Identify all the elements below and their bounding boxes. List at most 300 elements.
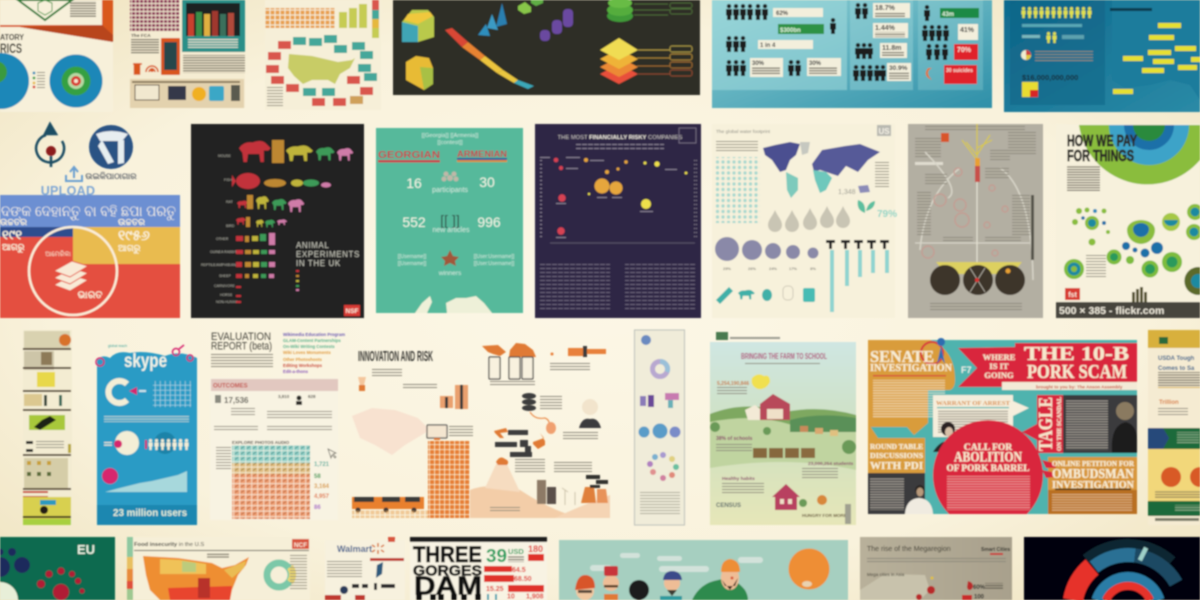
caption bar <box>1056 302 1200 318</box>
legend <box>875 162 889 188</box>
icon: cursor <box>328 449 336 458</box>
small line group <box>26 440 71 453</box>
donut <box>652 361 668 376</box>
red outer segment <box>1073 567 1092 600</box>
yellow roots <box>962 124 992 160</box>
panel: long strip infographic <box>23 330 72 525</box>
subtitle <box>745 362 820 365</box>
winners right <box>474 254 515 267</box>
subtitle lines <box>576 143 664 149</box>
pie bubble <box>104 431 139 455</box>
chart title <box>296 241 360 268</box>
panel: innovation and risk <box>352 343 610 518</box>
circle with books: ଭାରତ <box>78 290 102 301</box>
small label: global reach <box>108 344 127 348</box>
icon: syringe <box>550 346 606 357</box>
stat: 1.44%: 1.44% <box>875 25 896 32</box>
text lines <box>1155 490 1200 498</box>
stat lines <box>214 408 332 432</box>
figure: big money: $16,000,000,000 <box>1022 73 1078 82</box>
title: senate: SENATE <box>870 347 934 366</box>
bubble labels <box>540 157 677 238</box>
donut chart <box>267 563 293 587</box>
intro <box>211 353 273 368</box>
bus <box>352 497 424 512</box>
red callouts <box>266 41 373 106</box>
stat: 70%: 70% <box>957 47 972 54</box>
cluster: small bubbles <box>1072 208 1110 246</box>
panel: skype statistics <box>96 344 197 525</box>
stat: right: 23,000,254 students <box>808 461 854 467</box>
blue side <box>376 562 383 578</box>
stat: 62%: 62% <box>776 11 789 17</box>
field <box>710 418 856 470</box>
label: new articles <box>433 227 470 234</box>
bar chart <box>339 4 367 28</box>
isometric ribbon <box>445 28 534 89</box>
waffle values: 4,957 <box>314 494 330 500</box>
text block <box>490 381 535 386</box>
title: the 10-b: THE 10-B <box>1024 343 1129 365</box>
map <box>860 574 930 600</box>
colour strip <box>127 537 133 600</box>
icon: upload tray <box>66 167 82 181</box>
stat lines <box>1158 406 1188 416</box>
warrant callout <box>933 395 1029 437</box>
stat: 1,348 <box>838 189 856 196</box>
wall chart <box>428 441 470 518</box>
logo: Smart Cities <box>981 547 1010 553</box>
row labels: GUINEA RABBIT <box>210 250 238 254</box>
row labels: CARNIVORE <box>214 284 235 288</box>
ochre box round table: ROUND TABLE <box>870 442 923 451</box>
text blocks <box>490 459 592 512</box>
taps and streams <box>826 240 889 312</box>
program list: Edit-a-thons <box>283 369 309 374</box>
stat: people: 628 <box>308 394 316 399</box>
tan callout <box>350 96 363 104</box>
illustrations <box>799 495 827 507</box>
title: pork scam: PORK SCAM <box>1027 361 1127 383</box>
right year text: ଆଗରୁ <box>118 243 141 255</box>
central trunk <box>975 158 980 262</box>
person <box>579 399 601 428</box>
wind turbines <box>562 488 575 505</box>
stat: 79%: 79% <box>877 209 897 220</box>
map: usa choropleth <box>143 556 249 600</box>
ring chart <box>108 381 146 403</box>
row labels: HORSE <box>220 293 233 297</box>
panel: evaluation report <box>210 331 345 520</box>
logo: NSF <box>344 305 360 316</box>
row: mouse <box>239 140 353 163</box>
logo: US <box>877 125 891 136</box>
rule <box>134 550 309 551</box>
outcomes band <box>211 379 338 391</box>
right year text: ଉଚ୍ଚତର <box>118 217 145 227</box>
photo block: crowd <box>182 0 245 52</box>
stat lines <box>104 416 189 422</box>
connector boxes: layers <box>637 46 692 76</box>
program list: Wikimedia Education Program <box>283 332 345 337</box>
ochre box round table <box>868 423 925 478</box>
stat: people: 3,810 <box>278 394 290 399</box>
rule <box>1158 387 1200 388</box>
tray of thumbnails <box>130 79 244 108</box>
stat: 62% <box>773 8 823 17</box>
red rows <box>484 554 544 593</box>
row labels: MOUSE <box>218 154 232 158</box>
legend <box>267 86 283 106</box>
circle icons <box>1161 467 1200 487</box>
grid card <box>24 458 68 488</box>
yellow map tags <box>1113 23 1200 94</box>
red rows: 15.25 <box>486 586 504 593</box>
people rows <box>726 3 949 81</box>
bubble: finance <box>1162 213 1180 231</box>
panel: food insecurity map <box>127 537 310 600</box>
yellow header <box>1148 330 1200 348</box>
isometric pie 1 <box>402 10 434 42</box>
map label: Mega cities in Asia <box>867 572 905 577</box>
red circle <box>933 420 1043 514</box>
heading: USDA Tough <box>1158 356 1195 362</box>
petition box heading bg <box>1048 457 1137 490</box>
stat: 30.9%: 30.9% <box>889 65 908 72</box>
stat: 30%: 30% <box>752 61 765 67</box>
text block <box>183 55 245 73</box>
row labels: NON-HUMAN <box>216 300 238 304</box>
small rows: green <box>260 234 267 278</box>
red rows: 64.5 <box>512 567 526 574</box>
panel: innovation and risk: INNOVATION AND RISK <box>358 348 433 365</box>
bubble: right edge top <box>1187 204 1200 220</box>
panel: three gorges dam <box>410 537 547 600</box>
panel: how we pay for things <box>1056 124 1200 318</box>
trees <box>710 422 771 435</box>
heading: ATORY <box>0 32 24 42</box>
bubble: right edge lower <box>1186 224 1200 240</box>
bubble percentages: 17% <box>789 266 797 271</box>
yellow green card <box>23 497 71 525</box>
cable and mouse <box>530 412 556 434</box>
character: cap moustache <box>603 566 619 600</box>
stat block <box>717 381 749 396</box>
people row <box>1022 7 1092 18</box>
ochre speech bubble <box>868 340 955 435</box>
petition titles: INVESTIGATION <box>1052 479 1134 491</box>
header <box>422 133 479 146</box>
logo: F7 <box>961 365 972 375</box>
bubbles: middle <box>1106 242 1182 278</box>
text block <box>449 425 473 436</box>
plane right <box>533 433 545 449</box>
bubble: large green blue half <box>1127 220 1155 244</box>
icon: maps top <box>482 343 536 357</box>
table <box>540 263 695 309</box>
text block <box>550 362 590 370</box>
area chart <box>105 471 187 492</box>
panel: laboratory statistics poster <box>0 0 113 112</box>
stat: bottom <box>488 594 544 600</box>
bubble: dark olive <box>1184 267 1200 295</box>
green band <box>1148 501 1200 516</box>
panel: USDA <box>1148 330 1200 525</box>
icon: spark <box>372 543 384 554</box>
panel: teal statistics with people <box>712 0 992 108</box>
row labels <box>201 154 238 304</box>
red banner main <box>1015 343 1137 382</box>
hills dark village <box>790 415 856 454</box>
stat: 18.7% <box>873 3 910 18</box>
title <box>211 331 272 352</box>
stat: text <box>716 436 753 452</box>
proportion square <box>1022 82 1038 97</box>
stat: 30% <box>750 58 783 77</box>
where is it going: GOING <box>984 370 1014 380</box>
stat: text 2: Healthy habits <box>722 476 755 482</box>
title: THE MOST FINANCIALLY RISKY COMPANIES <box>558 135 683 141</box>
small rows: orange <box>245 236 251 278</box>
circle title: CALL FOR <box>964 443 1012 453</box>
wordmark: Walmart <box>337 544 372 554</box>
icon blocks orange <box>440 385 468 409</box>
black header <box>410 537 547 542</box>
icon: upload arrow ring <box>36 124 64 167</box>
row labels: SHEEP <box>219 274 232 278</box>
stat: people <box>278 394 316 405</box>
program list <box>283 332 345 374</box>
stat: $300bn <box>778 24 824 34</box>
winners left: [[Username]] <box>398 254 427 260</box>
stat: 39 USD: USD <box>508 547 524 556</box>
rule <box>873 375 946 376</box>
monitor <box>427 425 447 440</box>
chart: right ring <box>50 54 102 108</box>
mini bars <box>1132 287 1147 303</box>
stat: $300bn: $300bn <box>780 28 801 34</box>
dark circles <box>930 265 1025 295</box>
colour strip <box>372 0 379 38</box>
label: upload: UPLOAD <box>41 184 95 198</box>
stat: 30% second: 30% <box>809 61 822 67</box>
panel: blue US map poster <box>1004 0 1200 112</box>
red bubbles <box>37 568 84 600</box>
title: investigation: INVESTIGATION <box>870 362 952 374</box>
hatch <box>352 510 428 518</box>
icon: microphone <box>845 504 851 524</box>
yellow card <box>37 372 55 387</box>
small rows <box>236 236 243 303</box>
logo: NSF: NSF <box>346 308 359 315</box>
hills <box>470 486 580 518</box>
waffle values: 3,164 <box>314 484 330 490</box>
panel: dark isometric chart kit <box>393 0 700 95</box>
footer <box>1155 518 1199 521</box>
panel: financially risky companies <box>535 124 701 318</box>
left year text: ଉଚ୍ଚତର <box>0 217 27 227</box>
panel: EU bubbles <box>0 537 115 600</box>
map heading <box>1110 8 1152 11</box>
heading <box>1158 356 1195 372</box>
body text <box>873 380 945 418</box>
isometric cubes <box>518 0 543 14</box>
footer band: 23 million users <box>113 508 188 519</box>
header: [[contest]] <box>437 140 463 146</box>
grid <box>153 381 191 407</box>
connector boxes: green <box>634 3 692 15</box>
waffle chart <box>232 445 310 519</box>
heading line 2: RICS <box>0 41 22 56</box>
cream arc <box>0 582 18 600</box>
icon: wikisource blue disc <box>89 125 133 169</box>
red bar <box>370 558 404 561</box>
stat: 996: 996 <box>477 214 501 230</box>
ochre box round table: WITH PDI <box>870 460 923 472</box>
petition titles <box>1052 460 1135 491</box>
faint outer arcs <box>1086 544 1172 561</box>
yellow panel <box>1148 449 1200 501</box>
petition titles: ONLINE PETITION FOR <box>1052 460 1135 468</box>
heading: Comes to Sa <box>1158 366 1195 372</box>
text blocks <box>917 168 1034 260</box>
program list: GLAM-Content Partnerships <box>283 338 341 343</box>
winners right: [[User:Username]] <box>474 254 515 260</box>
title: HOW WE PAY <box>1067 133 1137 150</box>
character: green hill body <box>692 579 748 600</box>
cream strip <box>1002 382 1137 390</box>
stat: 11.8m <box>880 43 907 58</box>
icon: leaf <box>858 200 875 213</box>
row: bird <box>236 217 287 227</box>
text lines <box>1022 24 1093 61</box>
panel: dark radial chart <box>1024 537 1200 600</box>
heading: The global water footprint <box>716 129 771 135</box>
crates <box>753 448 815 458</box>
outcomes band: OUTCOMES <box>213 384 248 390</box>
panel: animal experiments in the UK <box>191 124 364 318</box>
panel: FCA technology poster <box>130 0 245 108</box>
left year text: ଆଗରୁ <box>2 242 25 254</box>
logo: fst: fst <box>1068 292 1077 299</box>
stat: 17,536: 17,536 <box>224 396 249 405</box>
petition rule <box>1055 488 1131 490</box>
yellow band <box>936 262 1022 274</box>
isometric pie 2 <box>406 56 433 90</box>
corner box <box>679 128 696 143</box>
stat: 18.7%: 18.7% <box>875 5 896 12</box>
left year text: ୧୯୧ <box>2 227 22 242</box>
blue outer arc right <box>1135 555 1176 583</box>
teal callouts <box>293 35 377 96</box>
pie <box>1021 50 1031 60</box>
title: REPORT (beta) <box>211 340 272 352</box>
blue ring <box>1097 577 1159 600</box>
winners right: [[User:Username]] <box>474 261 515 267</box>
character: hard hat head <box>721 559 740 590</box>
hill right <box>555 495 610 518</box>
isometric triangles <box>478 3 507 36</box>
cloud top <box>97 352 197 525</box>
volcano <box>485 458 520 492</box>
stat: 11.8m: 11.8m <box>882 45 901 52</box>
icon: brackets: [[ ]] <box>440 212 460 228</box>
stat: 30: 30 <box>479 174 495 190</box>
where is it going: IS IT <box>989 361 1009 371</box>
houses <box>745 394 790 420</box>
stat: 30 suicides: 30 suicides <box>946 68 973 74</box>
semicircle chart <box>1079 125 1200 184</box>
photo: woman <box>933 422 963 452</box>
small rows: yellow <box>252 236 259 278</box>
chart title: EXPERIMENTS <box>296 250 360 259</box>
navy bubbles <box>0 548 30 577</box>
bubble percentages: 26% <box>748 266 756 271</box>
circle title: ABOLITION <box>954 450 1022 466</box>
icon: star <box>441 250 459 266</box>
bubbles <box>715 237 818 261</box>
program list: Editing Workshops <box>283 363 323 368</box>
bubble percentages: 8% <box>810 266 816 271</box>
tagle dark box <box>1063 395 1137 453</box>
title: EVALUATION <box>211 331 271 343</box>
shield logo <box>641 335 651 345</box>
hills green <box>710 406 856 440</box>
map red dots <box>916 576 935 600</box>
body <box>1158 372 1200 386</box>
row labels: FISH <box>224 178 232 182</box>
waffle block <box>130 0 180 31</box>
green map card <box>29 415 65 430</box>
caption bar: 500 × 385 - flickr.com <box>1059 305 1164 317</box>
isometric layers <box>600 38 638 84</box>
header <box>716 332 780 340</box>
chart area <box>327 559 362 579</box>
stat: right <box>802 461 854 480</box>
footer band <box>97 505 197 525</box>
stat: 30 suicides <box>944 65 977 84</box>
title: BRINGING THE FARM TO SCHOOL <box>741 352 827 361</box>
circle title <box>946 443 1030 474</box>
school <box>772 484 800 510</box>
icons row <box>716 286 793 304</box>
petition red squiggles <box>1042 460 1056 478</box>
stat: red drop <box>967 581 986 591</box>
tagle title: TAGLE <box>1035 397 1057 451</box>
call to action: HUNGRY FOR MORE? <box>802 513 850 518</box>
panel: the 10-B pork scam <box>868 338 1137 514</box>
orange sun <box>788 548 830 590</box>
legend heading <box>207 553 229 558</box>
footer lines <box>930 302 1022 310</box>
circles <box>638 424 680 438</box>
title: The rise of the Megaregion <box>867 546 951 553</box>
list lines <box>1086 255 1106 277</box>
bottom lines <box>640 492 680 516</box>
stat: 43m <box>940 8 979 18</box>
seal ring <box>921 342 943 364</box>
icon: light bulb <box>358 377 366 391</box>
label: odia wordmark: ଉଇକିପାଠାଗାର <box>85 170 137 181</box>
ochre box round table: DISCUSSIONS <box>870 451 923 460</box>
map: world peach <box>352 408 430 455</box>
stat block: 5,254,190,846 <box>717 381 749 387</box>
stat: 43m: 43m <box>942 12 954 18</box>
phone icon <box>161 38 180 75</box>
panel: bringing the farm to school <box>710 332 856 525</box>
body lines <box>1067 165 1100 191</box>
left year text <box>0 217 27 254</box>
